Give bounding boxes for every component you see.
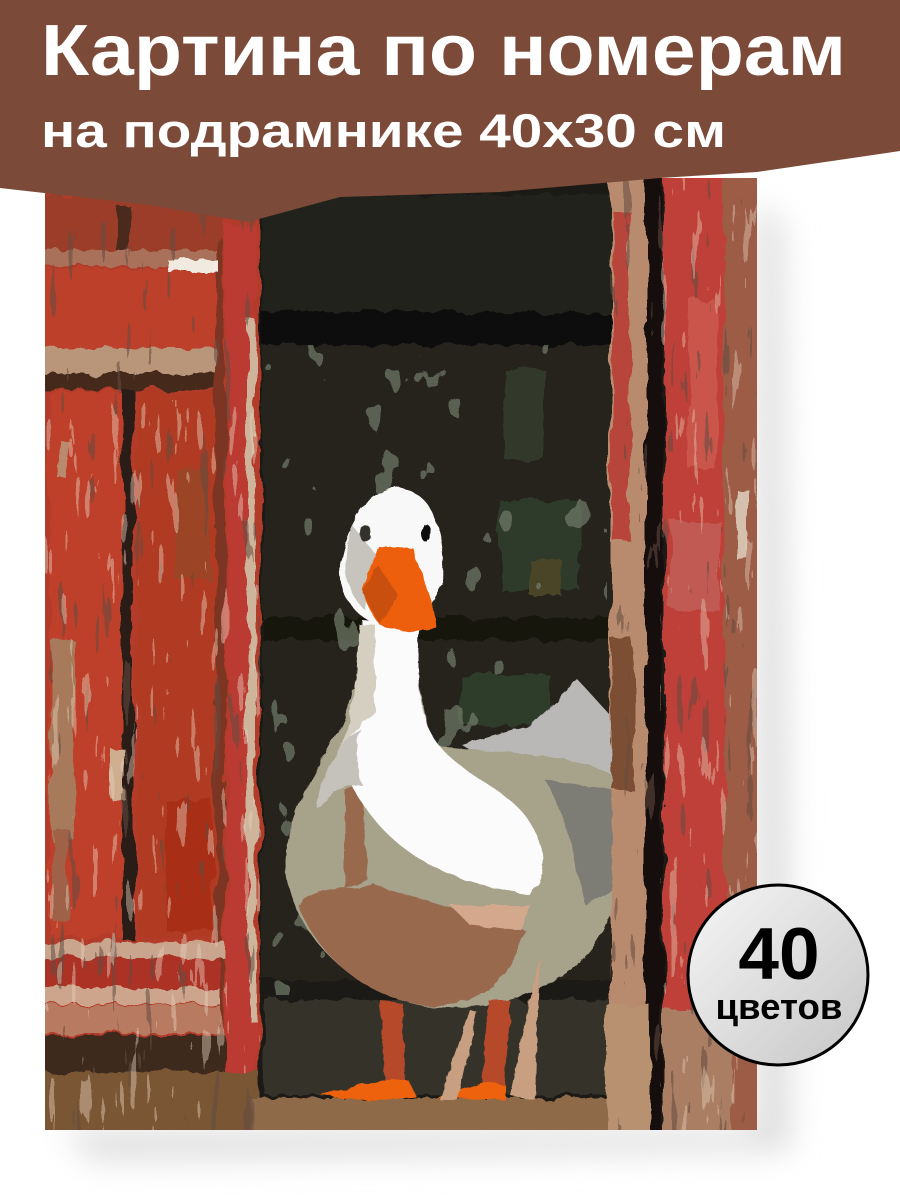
goose head (340, 488, 443, 625)
painted streak texture (45, 170, 757, 1130)
badge: 40 colours: 40 (738, 914, 820, 995)
goose feet (320, 1080, 416, 1101)
worn paint patches (50, 640, 74, 840)
goose neck and chest white (345, 620, 543, 895)
goose beak (362, 546, 437, 631)
goose legs (380, 1000, 405, 1085)
right wooden door frame (606, 170, 764, 1140)
painting: red barn door and goose (35, 170, 764, 1142)
goose grey flank (545, 780, 612, 905)
goose breast lower brown (298, 885, 525, 1006)
goose pink patch (450, 905, 530, 930)
dark doorway panels (250, 308, 613, 1130)
canvas shadow (60, 200, 790, 1160)
goose eyes (360, 524, 370, 542)
badge: 40 colours (688, 885, 868, 1065)
painting background: dark doorway (256, 178, 668, 1130)
neck shadow (317, 730, 362, 810)
goose (285, 488, 612, 1101)
straw (440, 955, 540, 1100)
left red door (35, 170, 260, 1142)
subtitle: на подрамнике 40х30 см (41, 104, 726, 157)
goose tail (462, 679, 612, 775)
head shadow (346, 525, 376, 610)
badge: 40 colours: цветов (716, 986, 842, 1027)
header banner (0, 0, 900, 222)
goose brown side streak (345, 785, 368, 888)
title: Картина по номерам (41, 10, 846, 91)
goose body (285, 660, 612, 1008)
